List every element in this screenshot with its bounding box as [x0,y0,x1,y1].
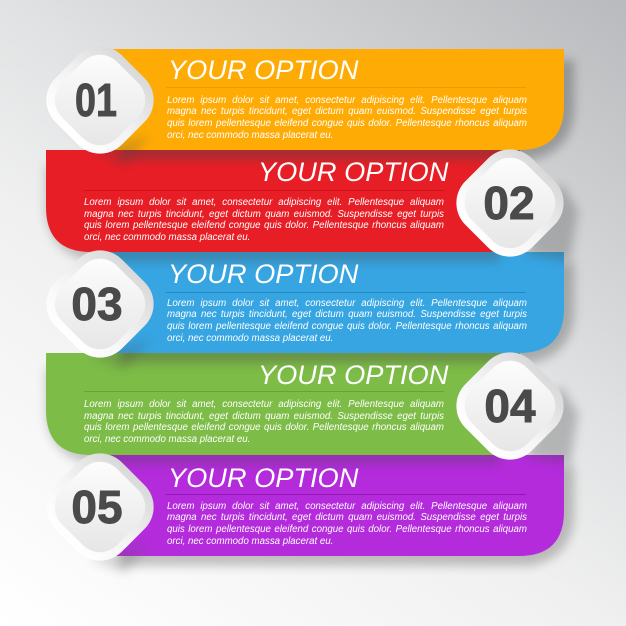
text block [167,94,527,141]
heading: YOUR OPTION [258,359,448,390]
text block: magna nec turpis tincidunt, eget dictum quam euismod. Suspendisse eget turpis [84,411,444,422]
heading: YOUR OPTION [168,462,358,493]
diamond badge 01: 01 [75,74,117,126]
text block: orci, nec commodo massa placerat eu. [167,333,333,344]
text block: magna nec turpis tincidunt, eget dictum quam euismod. Suspendisse eget turpis [167,309,527,320]
text block: magna nec turpis tincidunt, eget dictum quam euismod. Suspendisse eget turpis [167,512,527,523]
heading: YOUR OPTION [168,258,358,289]
text block: Lorem ipsum dolor sit amet, consectetur adipiscing elit. Pellentesque aliquam [84,197,444,208]
text block: orci, nec commodo massa placerat eu. [84,232,250,243]
text block: quis lorem pellentesque eleifend congue quis dolor. Pellentesque rhoncus aliquam [84,220,444,231]
text block: magna nec turpis tincidunt, eget dictum quam euismod. Suspendisse eget turpis [167,106,527,117]
panel: option 01 [46,49,579,168]
panel: option 05 [55,453,578,575]
text block: quis lorem pellentesque eleifend congue quis dolor. Pellentesque rhoncus aliquam [167,118,527,129]
panel: option 04 [42,352,582,469]
text block: orci, nec commodo massa placerat eu. [167,536,333,547]
diamond badge 02: 02 [483,177,535,229]
heading: YOUR OPTION [168,54,358,85]
text block [167,500,527,547]
text block: quis lorem pellentesque eleifend congue quis dolor. Pellentesque rhoncus aliquam [167,321,527,332]
text block: orci, nec commodo massa placerat eu. [167,130,333,141]
text block [167,298,527,344]
text block: Lorem ipsum dolor sit amet, consectetur adipiscing elit. Pellentesque aliquam [167,500,527,512]
panel: option 02 [41,149,582,266]
text block: magna nec turpis tincidunt, eget dictum quam euismod. Suspendisse eget turpis [84,209,444,220]
heading: YOUR OPTION [258,156,448,187]
text block [84,399,444,445]
diamond badge 05: 05 [71,481,123,533]
text block: Lorem ipsum dolor sit amet, consectetur adipiscing elit. Pellentesque aliquam [84,399,444,410]
text block: orci, nec commodo massa placerat eu. [84,434,250,445]
text block: quis lorem pellentesque eleifend congue quis dolor. Pellentesque rhoncus aliquam [84,422,444,433]
text block: quis lorem pellentesque eleifend congue quis dolor. Pellentesque rhoncus aliquam [167,524,527,535]
diamond badge 03: 03 [71,278,123,330]
panel: option 03 [46,250,579,372]
text block: Lorem ipsum dolor sit amet, consectetur adipiscing elit. Pellentesque aliquam [167,94,527,106]
text block [84,197,444,243]
diamond badge 04: 04 [484,380,536,432]
text block: Lorem ipsum dolor sit amet, consectetur adipiscing elit. Pellentesque aliquam [167,298,527,308]
